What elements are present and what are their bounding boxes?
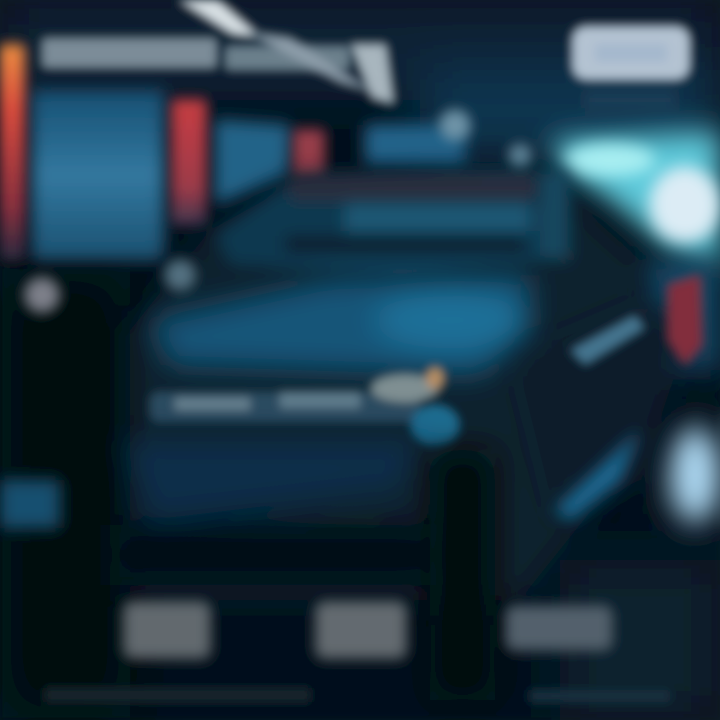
vehicle: grille and headlight [150,367,459,445]
stat box 1 [124,602,210,658]
stat box 3 [506,606,612,650]
vehicle: dark silhouette [130,170,660,600]
footer bar left [45,688,310,702]
subheading under badge [585,92,675,108]
logo badge [572,26,690,80]
bright window on right [550,130,720,270]
vehicle: cab and windscreen [215,170,570,275]
small round markers [25,110,531,312]
lower right glow [640,260,720,523]
panel: showroom wall [32,90,465,260]
vehicle: hood [150,275,530,375]
white diagonal accent [178,0,394,104]
left blue label block [0,480,60,528]
vehicle [110,170,690,700]
vehicle: door and side [430,300,690,700]
stat box 2 [316,602,406,658]
red side accent [570,275,702,365]
title [42,38,350,70]
red light columns [0,45,324,260]
vehicle: door highlight [555,430,640,520]
bright window highlights [565,144,720,243]
footer bar right [530,690,670,702]
vehicle: lower bumper [110,440,430,585]
